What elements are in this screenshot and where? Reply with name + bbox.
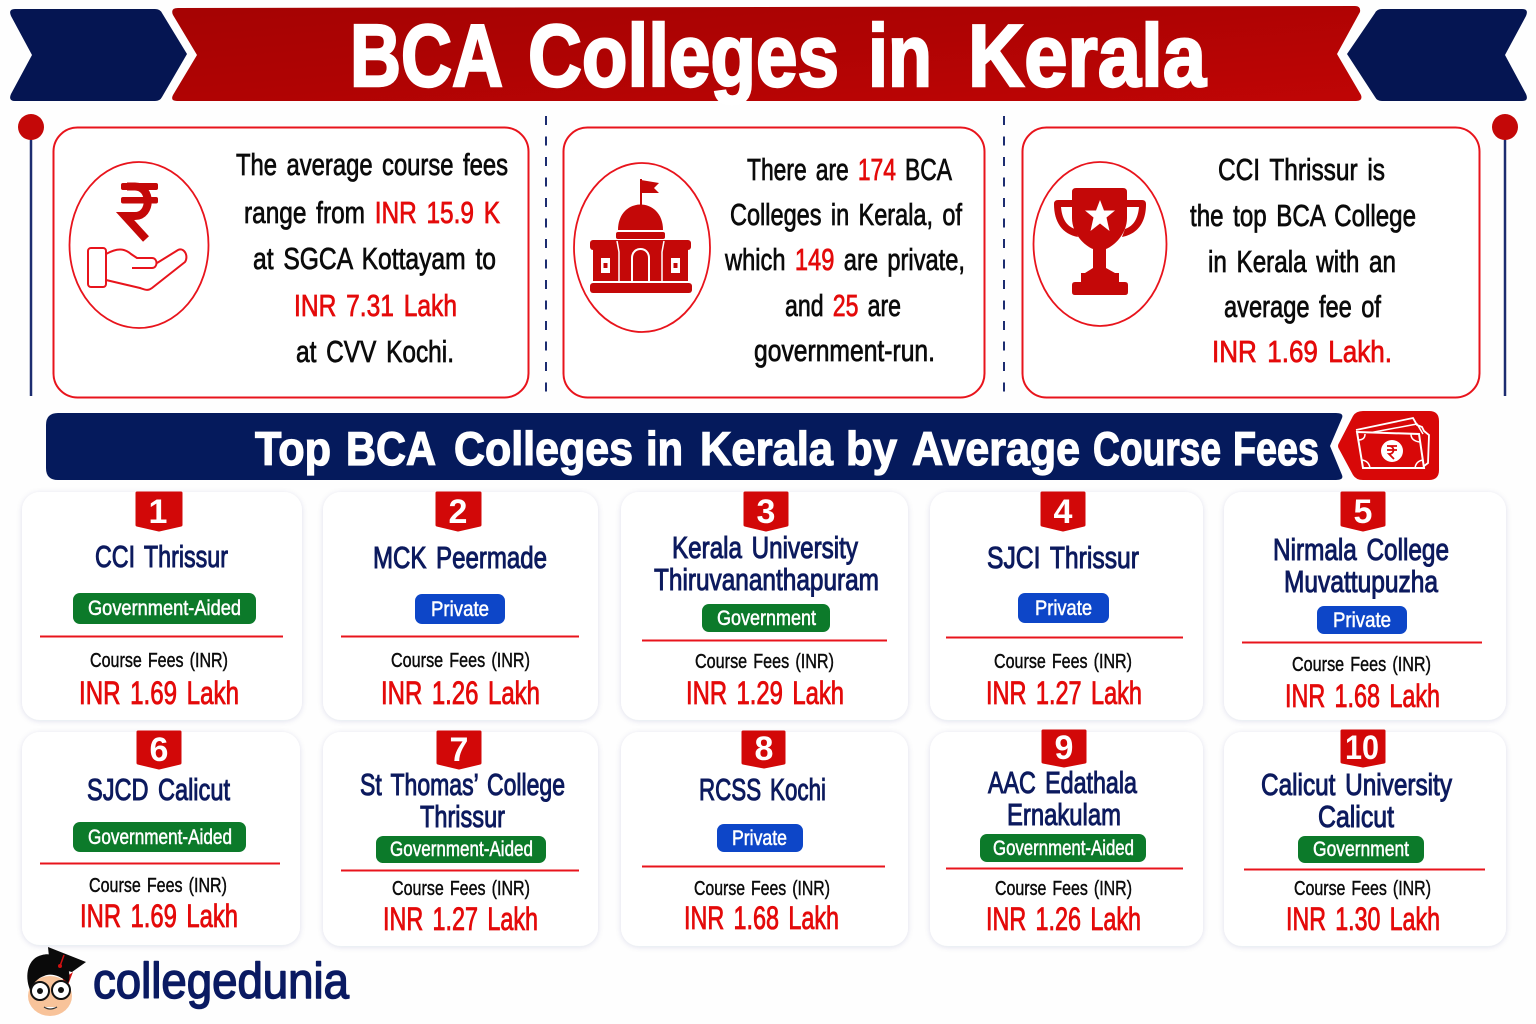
type pill: Private <box>1333 609 1391 632</box>
counts text: Colleges in Kerala, of <box>730 197 962 232</box>
icon: college building <box>574 163 710 332</box>
fees: INR 1.68 Lakh <box>1285 678 1440 714</box>
type pill <box>980 834 1146 862</box>
section heading <box>255 422 1319 475</box>
right navy ribbon <box>1347 9 1527 101</box>
rank badge 2: 2 <box>449 493 467 531</box>
fees: INR 1.68 Lakh <box>684 900 839 936</box>
fees text: at SGCA Kottayam to <box>253 241 496 276</box>
section heading: Fees <box>1233 422 1319 475</box>
fees: Course Fees (INR) <box>392 877 530 900</box>
college name: RCSS Kochi <box>699 772 826 807</box>
rank badge 5: 5 <box>1354 493 1372 531</box>
section heading: Average <box>912 422 1080 475</box>
type pill <box>1317 606 1407 634</box>
college name: Kerala University <box>672 530 858 565</box>
panel: top college <box>1022 128 1480 398</box>
fees <box>986 650 1142 711</box>
type pill: Government <box>1313 838 1409 861</box>
type pill: Private <box>1035 597 1092 620</box>
college name <box>988 765 1138 832</box>
fees <box>381 649 540 711</box>
left navy ribbon <box>10 9 187 101</box>
counts text <box>724 152 965 368</box>
fees text: INR 7.31 Lakh <box>294 288 457 323</box>
fees: INR 1.27 Lakh <box>986 675 1142 711</box>
college name: Muvattupuzha <box>1284 564 1439 599</box>
fees: Course Fees (INR) <box>1294 877 1431 900</box>
fees <box>686 650 844 711</box>
icon: graduate mascot <box>27 947 86 1016</box>
fees: INR 1.26 Lakh <box>381 675 540 711</box>
title banner <box>172 6 1361 105</box>
type pill: Private <box>431 598 489 621</box>
title: in <box>868 6 932 105</box>
rank badge 3: 3 <box>757 493 775 531</box>
type pill: Government-Aided <box>88 826 232 849</box>
card 1 <box>22 492 302 720</box>
card 9 <box>930 729 1203 946</box>
section heading: by <box>846 422 897 475</box>
left pin <box>18 114 44 396</box>
title: Kerala <box>968 6 1207 105</box>
card 8 <box>621 730 908 946</box>
logo <box>27 947 349 1016</box>
fees: Course Fees (INR) <box>89 874 227 897</box>
fees text <box>236 147 508 369</box>
section heading: Colleges <box>454 422 633 475</box>
fees <box>684 877 839 936</box>
rank badge 7: 7 <box>450 731 468 769</box>
college name: Thrissur <box>420 799 505 834</box>
top college text <box>1190 152 1416 369</box>
counts text: which 149 are private, <box>724 242 965 277</box>
title: Colleges <box>528 6 839 105</box>
section banner <box>46 413 1342 480</box>
icon: rupee over hand <box>70 162 208 328</box>
card 4 <box>930 492 1203 720</box>
card 5 <box>1224 492 1506 720</box>
section heading: Course <box>1093 422 1221 475</box>
rank badge 1: 1 <box>149 493 167 531</box>
fees text: range from INR 15.9 K <box>244 195 500 230</box>
type pill: Government <box>717 607 816 630</box>
card 6 <box>22 731 300 945</box>
rank badge 7 <box>438 731 480 769</box>
rank badge 4 <box>1042 493 1084 531</box>
fees text: at CVV Kochi. <box>296 334 454 369</box>
top college text: average fee of <box>1224 289 1381 324</box>
rank badge 10: 10 <box>1345 729 1379 767</box>
fees: Course Fees (INR) <box>90 649 228 672</box>
college name: Calicut University <box>1261 767 1452 802</box>
college name: SJCD Calicut <box>87 772 230 807</box>
rank badge 3 <box>745 493 787 531</box>
top college text: the top BCA College <box>1190 198 1416 233</box>
right pin <box>1492 114 1518 396</box>
fees: INR 1.69 Lakh <box>79 675 239 711</box>
fees <box>79 649 239 711</box>
fees: Course Fees (INR) <box>1292 653 1431 676</box>
college name: MCK Peermade <box>373 540 547 575</box>
section heading: Top <box>255 422 331 475</box>
card 2 <box>323 492 598 720</box>
fees: Course Fees (INR) <box>694 877 830 900</box>
top college text: INR 1.69 Lakh. <box>1212 334 1392 369</box>
rank badge 2 <box>437 493 480 531</box>
fees: Course Fees (INR) <box>995 877 1132 900</box>
counts text: government-run. <box>754 333 935 368</box>
college name: CCI Thrissur <box>95 539 228 574</box>
title <box>350 6 1207 105</box>
fees: INR 1.29 Lakh <box>686 675 844 711</box>
type pill <box>717 824 803 852</box>
fees: INR 1.26 Lakh <box>986 901 1141 937</box>
fees: INR 1.27 Lakh <box>383 901 538 937</box>
type pill: Government-Aided <box>390 838 533 861</box>
section heading: BCA <box>346 422 436 475</box>
rank badge 8 <box>743 730 784 768</box>
college name <box>1261 767 1452 834</box>
type pill <box>415 594 505 624</box>
panel: college counts <box>564 128 984 398</box>
card 10 <box>1224 729 1506 946</box>
rank badge 9 <box>1043 729 1085 767</box>
rank badge 9: 9 <box>1055 729 1073 767</box>
fees <box>1286 877 1440 937</box>
section heading: Kerala <box>700 422 834 475</box>
college name <box>1273 532 1449 599</box>
college name: Calicut <box>1318 799 1394 834</box>
card 7 <box>323 731 598 946</box>
fees: Course Fees (INR) <box>994 650 1132 673</box>
college name <box>360 767 565 834</box>
rank badge 5 <box>1342 493 1384 531</box>
card 3 <box>621 492 908 720</box>
rank badge 6: 6 <box>150 731 168 769</box>
fees text: The average course fees <box>236 147 508 182</box>
rank badge 1 <box>137 493 181 531</box>
type pill <box>1018 593 1109 623</box>
top college text: in Kerala with an <box>1208 244 1396 279</box>
type pill: Government-Aided <box>993 837 1134 860</box>
icon: banknotes <box>1338 411 1439 480</box>
fees: Course Fees (INR) <box>695 650 834 673</box>
fees: Course Fees (INR) <box>391 649 530 672</box>
rank badge 4: 4 <box>1054 493 1073 531</box>
college name: SJCI Thrissur <box>987 540 1139 575</box>
fees <box>986 877 1141 937</box>
wordmark: collegedunia <box>93 953 349 1009</box>
college name: Nirmala College <box>1273 532 1449 567</box>
top college text: CCI Thrissur is <box>1218 152 1385 187</box>
panel: average fees <box>54 128 528 398</box>
section heading: in <box>646 422 683 475</box>
rank badge 8: 8 <box>755 730 773 768</box>
type pill: Government-Aided <box>88 597 241 620</box>
fees: INR 1.30 Lakh <box>1286 901 1440 937</box>
fees <box>383 877 538 937</box>
fees: INR 1.69 Lakh <box>80 898 238 934</box>
college name: AAC Edathala <box>988 765 1138 800</box>
type pill <box>73 593 256 624</box>
fees <box>80 874 238 934</box>
counts text: There are 174 BCA <box>747 152 952 187</box>
type pill: Private <box>732 827 787 850</box>
icon: trophy <box>1034 162 1166 326</box>
college name <box>654 530 879 597</box>
counts text: and 25 are <box>785 288 901 323</box>
title: BCA <box>350 6 503 105</box>
college name: St Thomas’ College <box>360 767 565 802</box>
type pill <box>73 822 246 852</box>
college name: Thiruvananthapuram <box>654 562 879 597</box>
rank badge 6 <box>138 731 180 769</box>
college name: Ernakulam <box>1007 797 1121 832</box>
fees <box>1285 653 1440 714</box>
